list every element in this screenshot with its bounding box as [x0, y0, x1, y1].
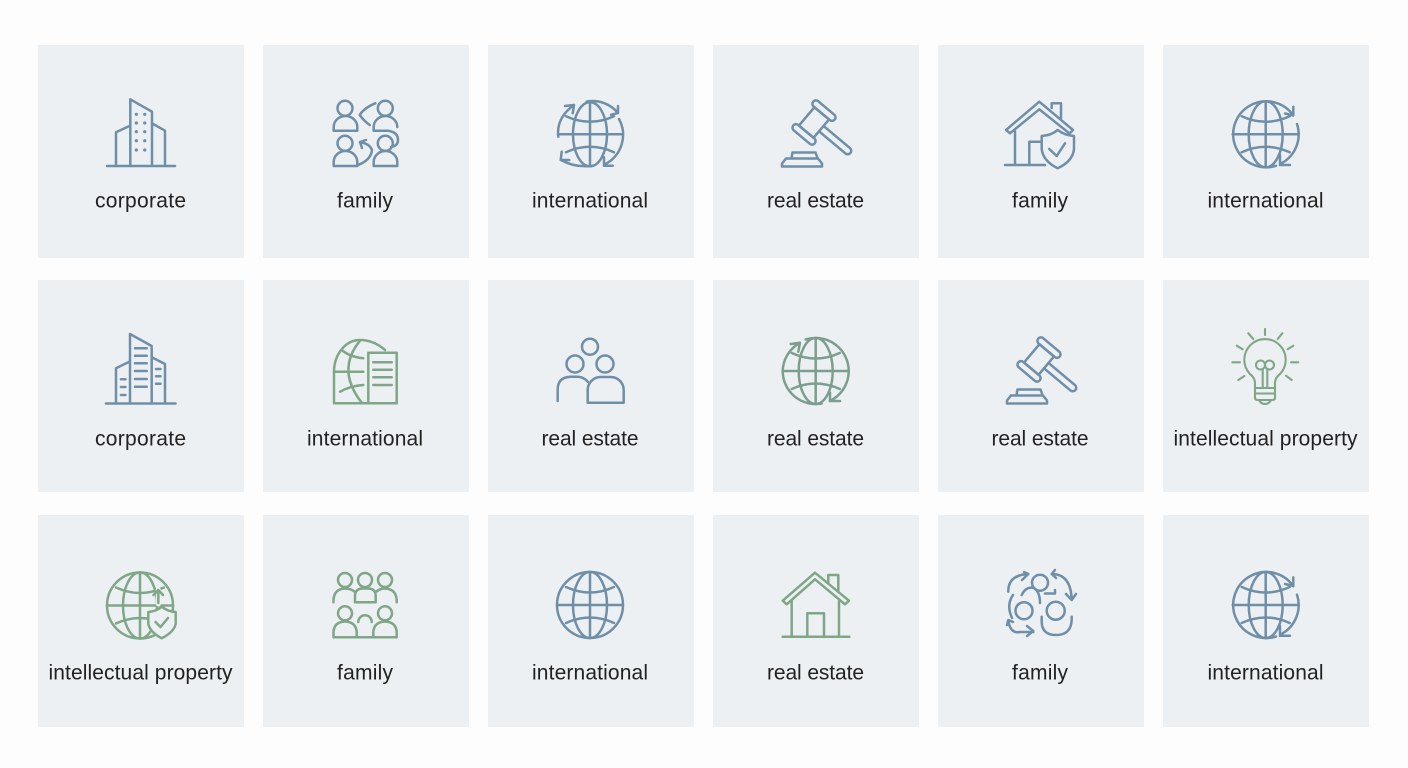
icon: people with cycle arrows [1007, 570, 1076, 636]
panel: real estate (row 3) [713, 515, 919, 727]
label: international [1208, 190, 1324, 212]
icon: globe [557, 572, 623, 638]
panel: international (row 3) [488, 515, 694, 727]
panel: intellectual property (row 3) [38, 515, 244, 727]
panel: real estate (row 2, globe) [713, 280, 919, 492]
icon: office buildings with windows [106, 334, 176, 404]
panel: family (row 1) [263, 45, 469, 258]
label: international [307, 428, 423, 450]
icon: globe with document [334, 340, 397, 403]
label: intellectual property [1174, 428, 1358, 450]
panel: family (row 3) [263, 515, 469, 727]
label: intellectual property [48, 662, 233, 684]
panel: international (row 1) [488, 45, 694, 258]
panel: real estate (row 2, gavel) [938, 280, 1144, 492]
panel: corporate (row 2) [38, 280, 244, 492]
label: family [1012, 662, 1068, 684]
icon: globe with arrows [1233, 572, 1299, 638]
label: real estate [992, 428, 1088, 450]
label: international [532, 190, 648, 212]
panel: intellectual property (row 2) [1163, 280, 1369, 492]
icon: light bulb [1232, 329, 1298, 404]
label: international [532, 662, 648, 684]
icon: globe with shield [107, 572, 176, 638]
label: corporate [95, 428, 186, 450]
label: corporate [95, 190, 186, 212]
label: real estate [767, 662, 864, 684]
panel: international (row 2, document) [263, 280, 469, 492]
label: family [337, 662, 394, 684]
panel: family (row 3, cycle) [938, 515, 1144, 727]
panel: corporate (row 1) [38, 45, 244, 258]
panel: international (row 1, second) [1163, 45, 1369, 258]
label: family [1012, 190, 1068, 212]
icon: three people [558, 339, 624, 403]
panel: family house with shield (row 1) [938, 45, 1144, 258]
icon: globe surrounded by four arrows [558, 101, 623, 166]
icon: house [783, 573, 849, 637]
label: real estate [542, 428, 638, 450]
icon: gavel [782, 99, 863, 168]
icon: office buildings with dots [107, 99, 175, 166]
icon: four people with exchange arrows [334, 101, 398, 166]
panel: real estate (row 2, people) [488, 280, 694, 492]
label: international [1208, 662, 1324, 684]
icon: gavel [1007, 336, 1088, 405]
icon: house with shield [1005, 102, 1074, 168]
label: family [337, 190, 394, 212]
icon: globe with arrows [1233, 101, 1299, 167]
icon: globe with arrows [783, 338, 849, 404]
label: real estate [767, 428, 864, 450]
icon: group of people [334, 573, 397, 637]
panel: real estate (row 1) [713, 45, 919, 258]
label: real estate [767, 190, 864, 212]
panel: international (row 3, second) [1163, 515, 1369, 727]
